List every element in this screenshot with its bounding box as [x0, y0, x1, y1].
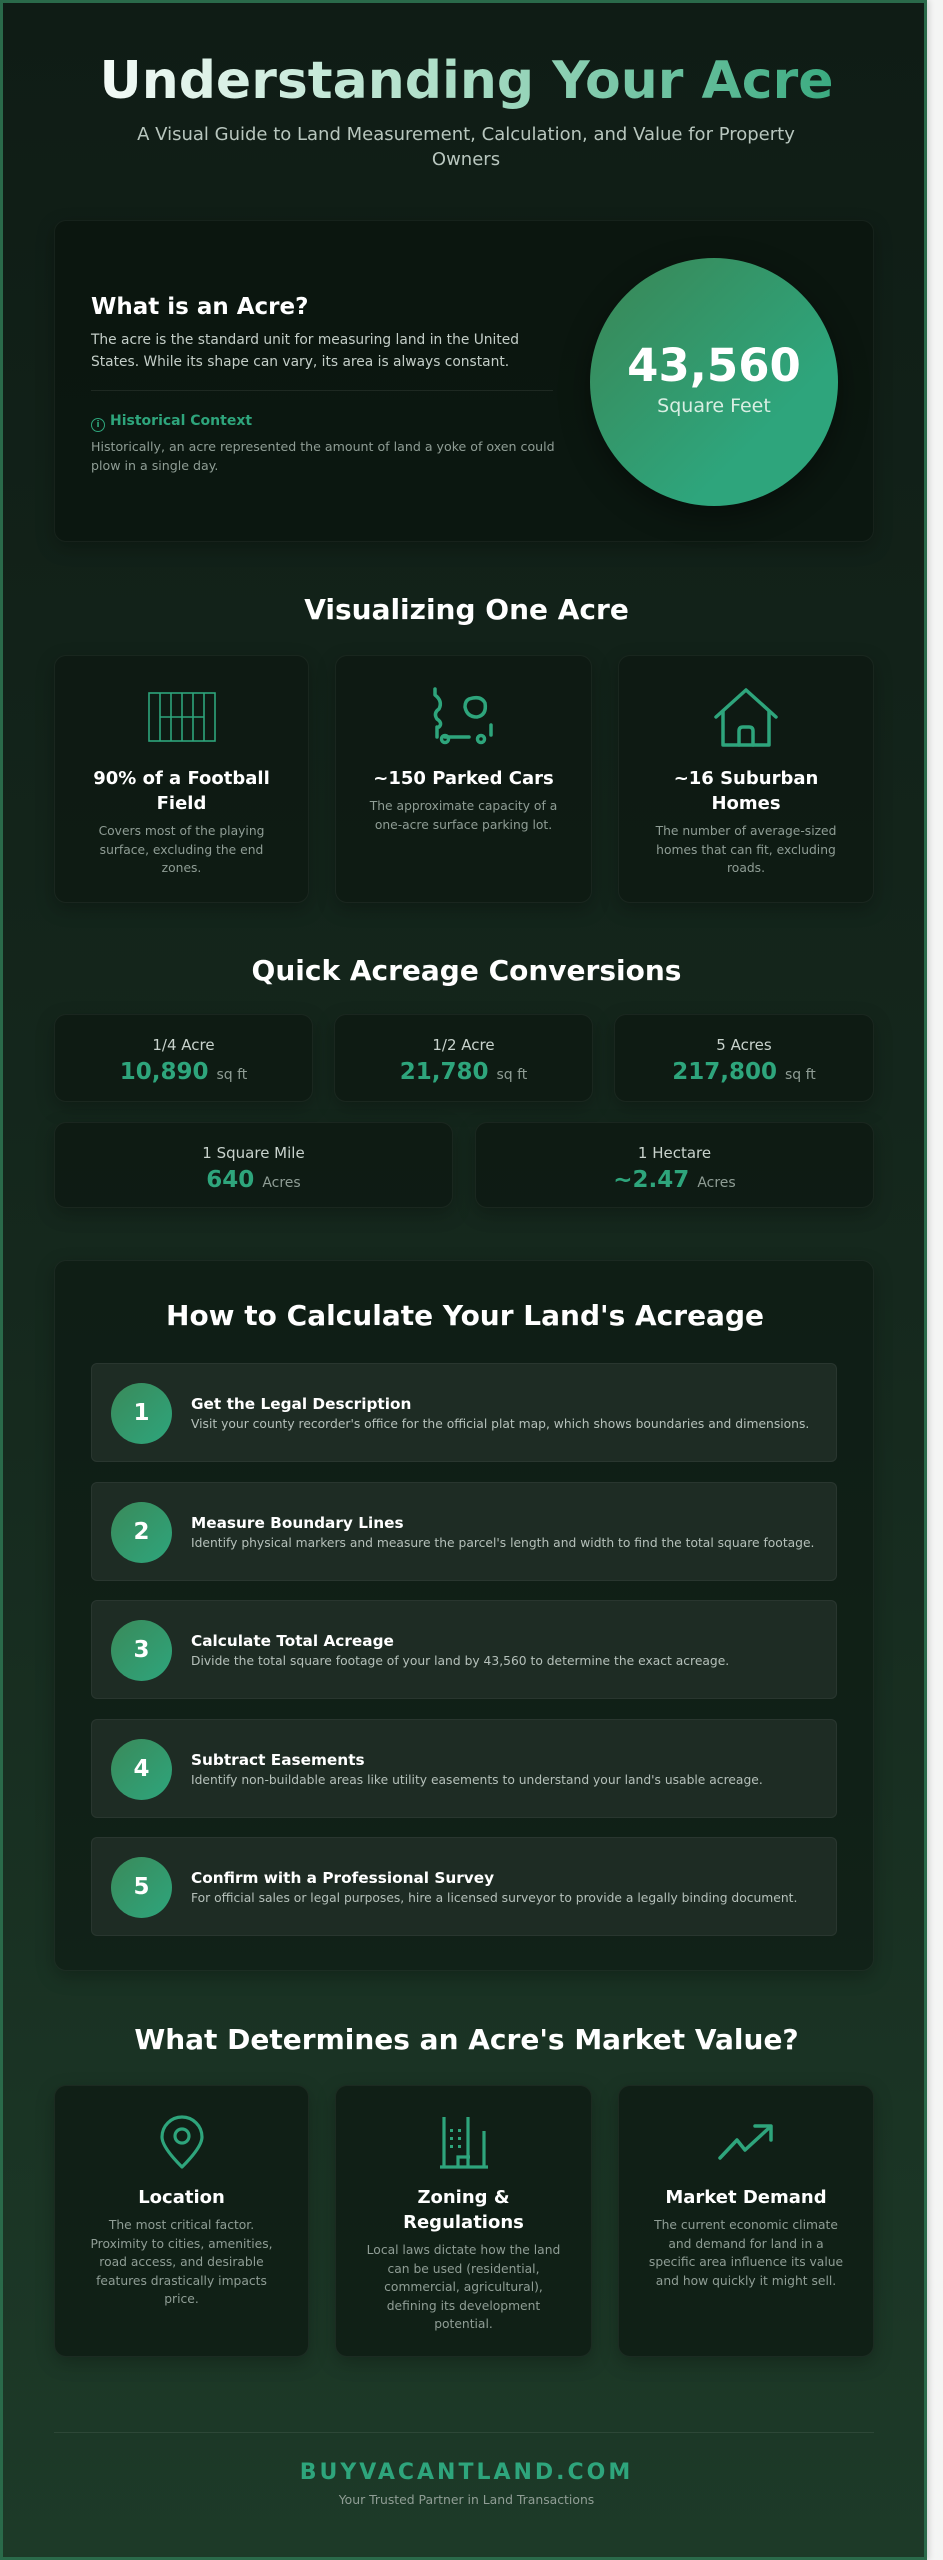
text: acre definition: The acre is the standard unit for measuring land in the United States. While its shape can vary, its area is always constant. — [91, 332, 519, 370]
icon: building — [440, 2117, 488, 2169]
icon: house — [714, 688, 778, 747]
footer brand: BUYVACANTLAND.COM — [300, 2460, 633, 2485]
panel: what is an acre — [54, 220, 874, 542]
heading: visualizing one acre: Visualizing One Acre — [304, 593, 629, 626]
icon: car — [433, 687, 493, 744]
conversion: 5 acres: 217,800 sq ft — [672, 1059, 816, 1085]
step 1: Visit your county recorder's office for the official plat map, which shows boundaries and dimensions. — [191, 1417, 809, 1431]
step 2 — [91, 1482, 837, 1581]
card: zoning: Local laws dictate how the land can be used (residential, commercial, agricultural), defining its development potential. — [367, 2243, 560, 2331]
card: parked cars: The approximate capacity of a one-acre surface parking lot. — [370, 799, 557, 832]
conversion: hectare: 1 Hectare — [638, 1144, 711, 1162]
heading: what is an acre: What is an Acre? — [91, 294, 308, 320]
conversion: 5 acres — [614, 1014, 874, 1102]
step 1: Get the Legal Description — [191, 1395, 411, 1413]
conversion: square mile: 1 Square Mile — [202, 1144, 305, 1162]
card: suburban homes — [618, 655, 874, 903]
stat circle: 43,560 sq ft: 43,560 — [627, 339, 801, 392]
step 5: Confirm with a Professional Survey — [191, 1869, 494, 1887]
card: suburban homes: The number of average-sized homes that can fit, excluding roads. — [656, 824, 836, 875]
text: history: Historically, an acre represented the amount of land a yoke of oxen could plow in a single day. — [91, 439, 555, 473]
card: market demand: Market Demand — [665, 2187, 827, 2208]
subtitle: A Visual Guide to Land Measurement, Calculation, and Value for Property Owners — [137, 124, 795, 170]
title: Understanding Your Acre — [99, 51, 834, 111]
stat circle: 43,560 sq ft: Square Feet — [657, 395, 771, 417]
card: market demand — [618, 2085, 874, 2357]
card: football field: Covers most of the playing surface, excluding the end zones. — [99, 824, 264, 875]
conversion: 1/2 acre — [334, 1014, 593, 1102]
card: parked cars: ~150 Parked Cars — [373, 768, 554, 789]
step 2: Measure Boundary Lines — [191, 1514, 404, 1532]
step 5: 5 — [133, 1874, 150, 1900]
heading: historical context: i — [96, 420, 100, 430]
conversion: hectare — [475, 1122, 874, 1208]
step 5: For official sales or legal purposes, hire a licensed surveyor to provide a legally binding document. — [191, 1891, 797, 1905]
card: football field — [54, 655, 309, 903]
step 5 — [91, 1837, 837, 1936]
conversion: square mile: 640 Acres — [206, 1167, 301, 1193]
footer tagline: Your Trusted Partner in Land Transactions — [339, 2492, 594, 2507]
icon: pin — [160, 2115, 204, 2169]
icon: trend arrow — [718, 2124, 773, 2160]
conversion: 1/4 acre — [54, 1014, 313, 1102]
icon: field grid — [148, 692, 216, 742]
step 1: 1 — [133, 1400, 150, 1426]
step 4 — [91, 1719, 837, 1818]
conversion: square mile — [54, 1122, 453, 1208]
card: zoning: Zoning & Regulations — [403, 2187, 524, 2233]
step 3 — [91, 1600, 837, 1699]
conversion: 5 acres: 5 Acres — [716, 1036, 772, 1054]
heading: how to calculate: How to Calculate Your Land's Acreage — [166, 1299, 764, 1332]
card: location — [54, 2085, 309, 2357]
step 3: 3 — [133, 1637, 150, 1663]
step 3: Divide the total square footage of your land by 43,560 to determine the exact acreage. — [191, 1654, 729, 1668]
card: parked cars — [335, 655, 592, 903]
step 2: Identify physical markers and measure the parcel's length and width to find the total square footage. — [191, 1536, 814, 1550]
conversion: 1/2 acre: 1/2 Acre — [432, 1036, 495, 1054]
card: market demand: The current economic climate and demand for land in a specific area influence its value and how quickly it might sell. — [649, 2218, 843, 2288]
panel: how to calculate — [54, 1260, 874, 1971]
heading: quick conversions: Quick Acreage Conversions — [252, 954, 681, 987]
step 4: Identify non-buildable areas like utility easements to understand your land's usable acreage. — [191, 1773, 763, 1787]
card: football field: 90% of a Football Field — [93, 768, 270, 814]
step 4: Subtract Easements — [191, 1751, 365, 1769]
conversion: 1/2 acre: 21,780 sq ft — [400, 1059, 527, 1085]
step 4: 4 — [133, 1756, 150, 1782]
card: location: The most critical factor. Proximity to cities, amenities, road access, and desirable features drastically impacts price. — [90, 2218, 273, 2306]
heading: market value: What Determines an Acre's Market Value? — [134, 2023, 799, 2056]
step 2: 2 — [133, 1519, 150, 1545]
step 1 — [91, 1363, 837, 1462]
card: suburban homes: ~16 Suburban Homes — [674, 768, 818, 814]
card: zoning — [335, 2085, 592, 2357]
conversion: 1/4 acre: 1/4 Acre — [152, 1036, 215, 1054]
step 3: Calculate Total Acreage — [191, 1632, 394, 1650]
stat circle: 43,560 sq ft — [590, 258, 838, 506]
card: location: Location — [138, 2187, 225, 2208]
heading: historical context: Historical Context — [110, 413, 252, 429]
conversion: hectare: ~2.47 Acres — [613, 1167, 736, 1193]
conversion: 1/4 acre: 10,890 sq ft — [120, 1059, 247, 1085]
